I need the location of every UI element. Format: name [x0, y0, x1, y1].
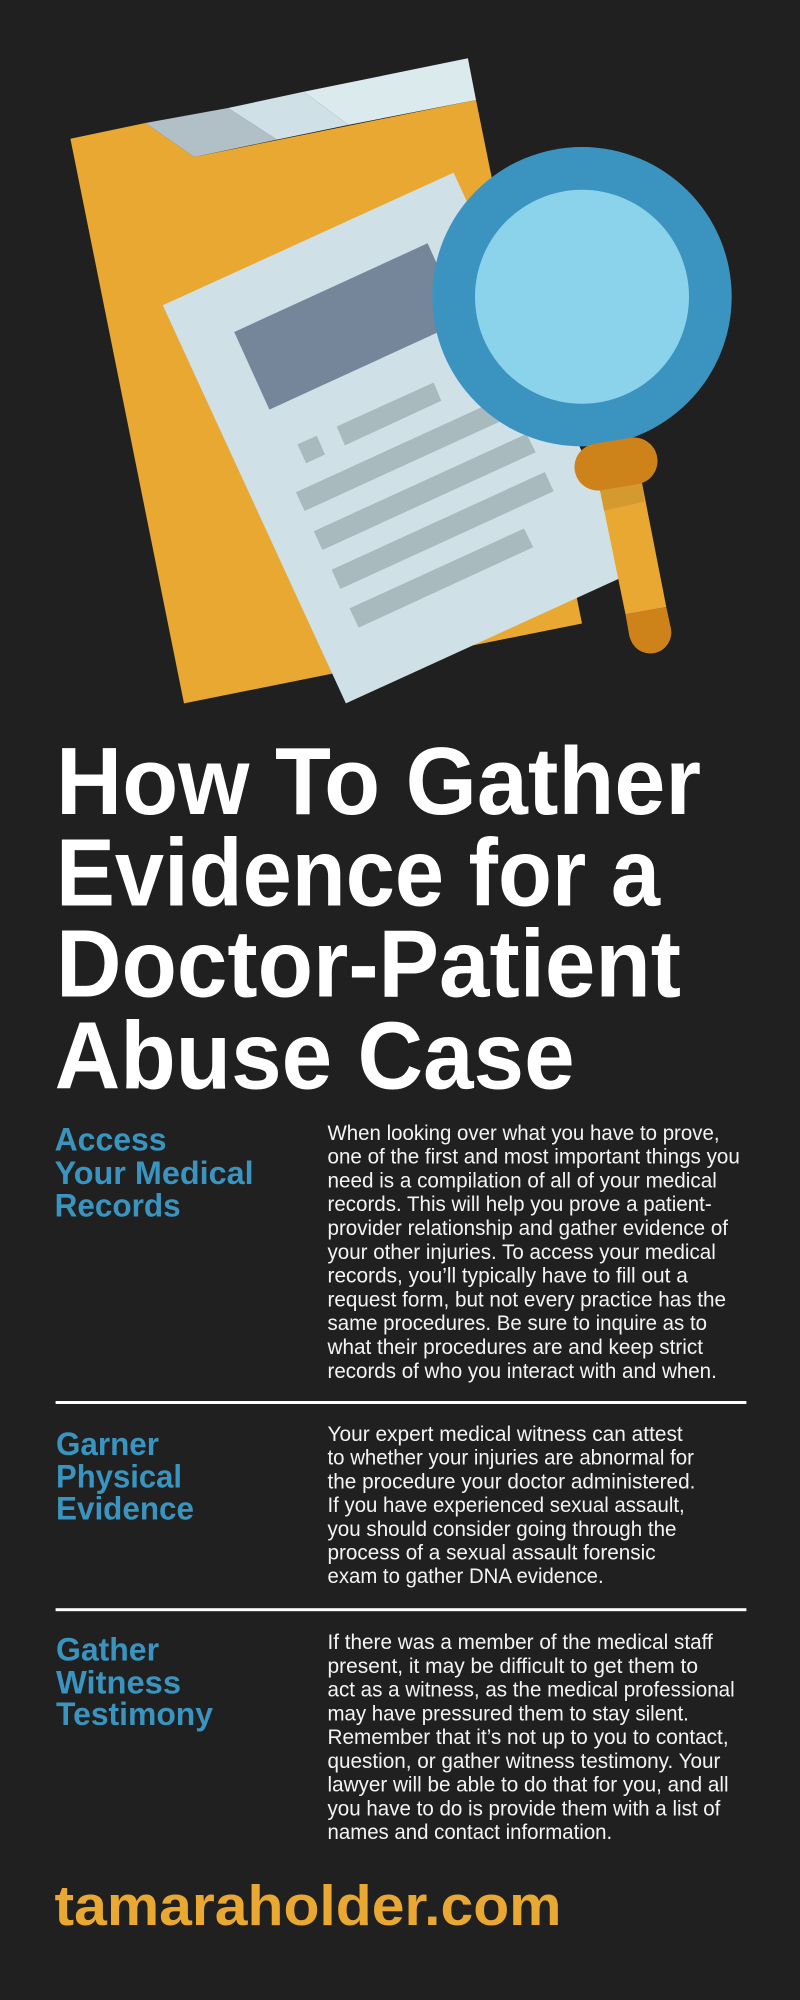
- text block: access your medical records: provider relationship and gather evidence of: [328, 1217, 728, 1240]
- text block: access your medical records: request form, but not every practice has the: [328, 1288, 726, 1311]
- heading: gather witness testimony: [56, 1632, 213, 1732]
- heading: access your medical records: Your Medical: [55, 1155, 254, 1191]
- text block: access your medical records: When looking over what you have to prove,: [328, 1122, 720, 1145]
- heading: garner physical evidence: Physical: [56, 1458, 182, 1494]
- text block: gather witness testimony: question, or gather witness testimony. Your: [328, 1750, 720, 1773]
- text block: garner physical evidence: the procedure your doctor administered.: [328, 1470, 695, 1493]
- icon: magnifying glass: [432, 147, 732, 654]
- title: [55, 728, 701, 1110]
- text block: gather witness testimony: you have to do is provide them with a list of: [328, 1797, 721, 1820]
- text block: gather witness testimony: present, it may be difficult to get them to: [328, 1655, 698, 1678]
- panel: access your medical records: [55, 1122, 740, 1383]
- text block: access your medical records: same procedures. Be sure to inquire as to: [328, 1312, 707, 1335]
- text block: gather witness testimony: If there was a member of the medical staff: [328, 1631, 713, 1654]
- text block: gather witness testimony: lawyer will be able to do that for you, and all: [328, 1774, 729, 1796]
- text block: garner physical evidence: If you have experienced sexual assault,: [328, 1494, 685, 1517]
- icon: folder: [70, 58, 582, 703]
- text block: access your medical records: what their procedures are and keep strict: [327, 1336, 703, 1359]
- text block: access your medical records: your other injuries. To access your medical: [328, 1241, 716, 1264]
- panel: garner physical evidence: [56, 1423, 695, 1588]
- heading: access your medical records: [55, 1122, 254, 1224]
- heading: garner physical evidence: [56, 1426, 194, 1527]
- heading: access your medical records: Access: [55, 1122, 167, 1158]
- icon: document: [163, 173, 637, 703]
- text block: garner physical evidence: exam to gather DNA evidence.: [328, 1565, 604, 1588]
- text block: garner physical evidence: to whether your injuries are abnormal for: [328, 1447, 694, 1470]
- heading: gather witness testimony: Testimony: [56, 1696, 213, 1732]
- heading: access your medical records: Records: [55, 1188, 181, 1224]
- text block: access your medical records: records. This will help you prove a patient-: [328, 1193, 712, 1216]
- text block: access your medical records: [327, 1122, 740, 1383]
- panel: gather witness testimony: [56, 1631, 735, 1844]
- title: Abuse Case: [55, 1003, 575, 1110]
- text block: gather witness testimony: act as a witness, as the medical professional: [328, 1678, 735, 1702]
- text block: access your medical records: records, you’ll typically have to fill out a: [328, 1265, 688, 1288]
- heading: garner physical evidence: Garner: [56, 1426, 159, 1462]
- text block: garner physical evidence: process of a sexual assault forensic: [328, 1542, 656, 1564]
- text block: gather witness testimony: names and contact information.: [328, 1821, 612, 1844]
- text block: gather witness testimony: may have pressured them to stay silent.: [328, 1702, 689, 1725]
- text block: gather witness testimony: [328, 1631, 735, 1844]
- footer website: tamaraholder.com: [54, 1874, 562, 1938]
- text block: access your medical records: need is a compilation of all of your medical: [328, 1169, 717, 1192]
- text block: gather witness testimony: Remember that it’s not up to you to contact,: [328, 1726, 729, 1749]
- text block: garner physical evidence: you should consider going through the: [328, 1518, 676, 1541]
- heading: garner physical evidence: Evidence: [56, 1491, 194, 1527]
- text block: access your medical records: records of who you interact with and when.: [328, 1360, 717, 1383]
- title: How To Gather: [56, 728, 701, 835]
- text block: access your medical records: one of the first and most important things you: [328, 1146, 740, 1169]
- title: Doctor-Patient: [56, 911, 681, 1018]
- title: Evidence for a: [56, 820, 661, 927]
- heading: gather witness testimony: Witness: [56, 1664, 181, 1700]
- text block: garner physical evidence: [328, 1423, 695, 1588]
- illustration: folder, document and magnifying glass: [70, 58, 732, 703]
- heading: gather witness testimony: Gather: [56, 1632, 159, 1668]
- text block: garner physical evidence: Your expert medical witness can attest: [328, 1423, 683, 1446]
